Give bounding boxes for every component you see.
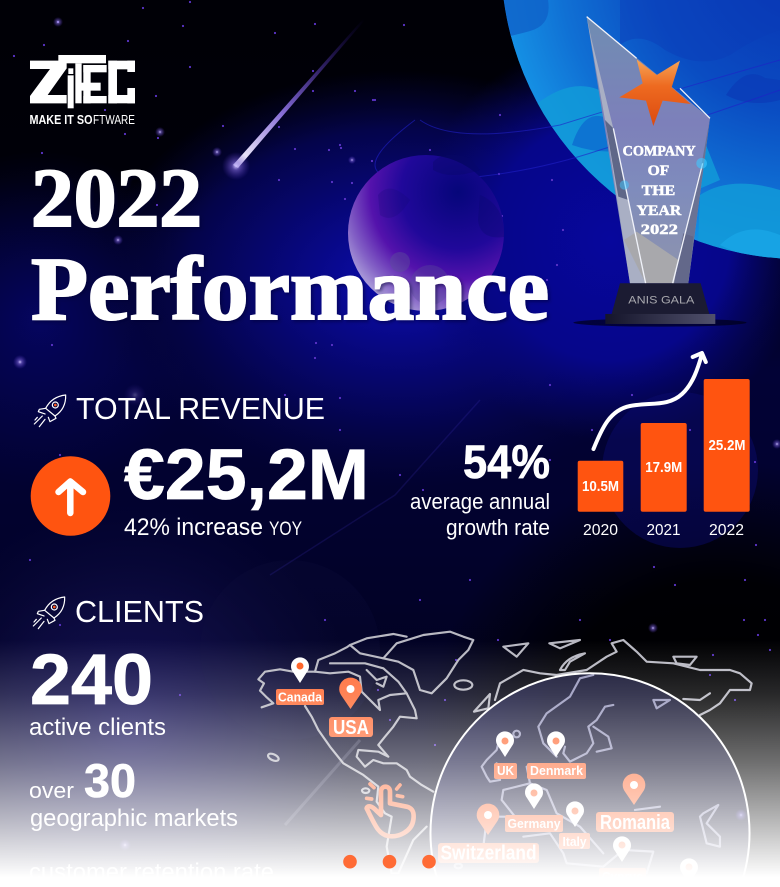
revenue increase: 42% increase [124,514,263,541]
trophy text: 2022 [641,222,678,238]
retention stat: customer retention rate [29,859,274,886]
trophy text [623,144,696,238]
growth rate stat: growth rate [446,515,550,540]
map: americas and greenland [258,632,473,873]
icon: rocket [33,597,65,629]
comet [222,19,365,180]
world map [258,632,752,873]
trophy star [619,59,691,126]
revenue increase: YOY [269,519,302,540]
title: 2022 [31,152,202,245]
bar chart: 2020 [583,522,618,539]
fade to white overlay [0,640,780,887]
growth rate stat [410,435,550,540]
trophy base [612,283,709,314]
bar chart: 2022 [709,522,744,539]
pin: Italy: Italy [562,834,587,849]
bar chart: 10.5M [582,479,619,495]
logo tagline: FTWARE [93,113,135,127]
pin: Germany [505,783,563,832]
pin: Italy [559,801,590,849]
pin: Israel [680,858,698,884]
growth rate stat: 54% [463,435,550,488]
logo [30,55,135,127]
pin: USA [329,678,373,739]
icon: rocket [34,395,66,427]
pin: Romania [596,774,674,834]
section: total revenue [31,353,750,541]
pin: Canada [276,657,324,705]
logo tagline: MAKE IT SO [30,113,93,127]
pin: Romania: Romania [600,812,671,834]
title: Performance [31,240,549,339]
trophy text: COMPANY [623,144,696,160]
icon: up arrow [31,456,110,536]
active clients stat: active clients [29,714,166,741]
zoom circle [430,673,750,887]
bar chart [578,379,750,539]
planet rings [375,60,780,180]
pin: Cyprus [599,836,646,886]
pin: Denmark [527,731,586,779]
markets stat: over [29,778,74,803]
pin: USA: USA [333,717,369,739]
bar chart: 25.2M [708,438,746,454]
pin: Germany: Germany [508,816,561,831]
active clients stat: 240 [30,641,153,720]
pin: UK [494,731,517,779]
growth arrow [594,353,706,449]
heading: total revenue: TOTAL REVENUE [76,391,325,426]
trophy text: THE [642,183,675,199]
pin: UK: UK [497,763,515,778]
trophy text: OF [648,163,669,179]
section: clients [29,594,274,886]
icon: tap hand [367,784,414,836]
markets stat: 30 [84,754,136,807]
trophy: ANIS GALA [628,295,695,307]
pin: Switzerland [438,804,539,864]
pin: Switzerland: Switzerland [440,842,536,864]
blue planet [501,0,780,264]
pin: Cyprus: Cyprus [602,869,643,884]
trophy [573,17,747,327]
pin: Denmark: Denmark [530,763,584,778]
map pins and labels [276,657,698,886]
markets stat: geographic markets [30,805,238,832]
logo tagline [30,113,135,127]
revenue value: €25,2M [124,436,369,515]
pin: Canada: Canada [278,690,323,704]
bar chart: 17.9M [645,460,682,476]
carousel dots [343,855,436,868]
map: eurasia and africa [474,640,752,873]
growth rate stat: average annual [410,489,550,514]
bar chart: 2021 [646,522,680,539]
markets stat [29,754,238,832]
trophy text: YEAR [637,203,681,219]
purple planet [348,155,504,311]
logo mark [30,55,135,108]
active clients stat [29,641,166,741]
heading: clients: CLIENTS [75,594,204,629]
title [31,152,549,339]
